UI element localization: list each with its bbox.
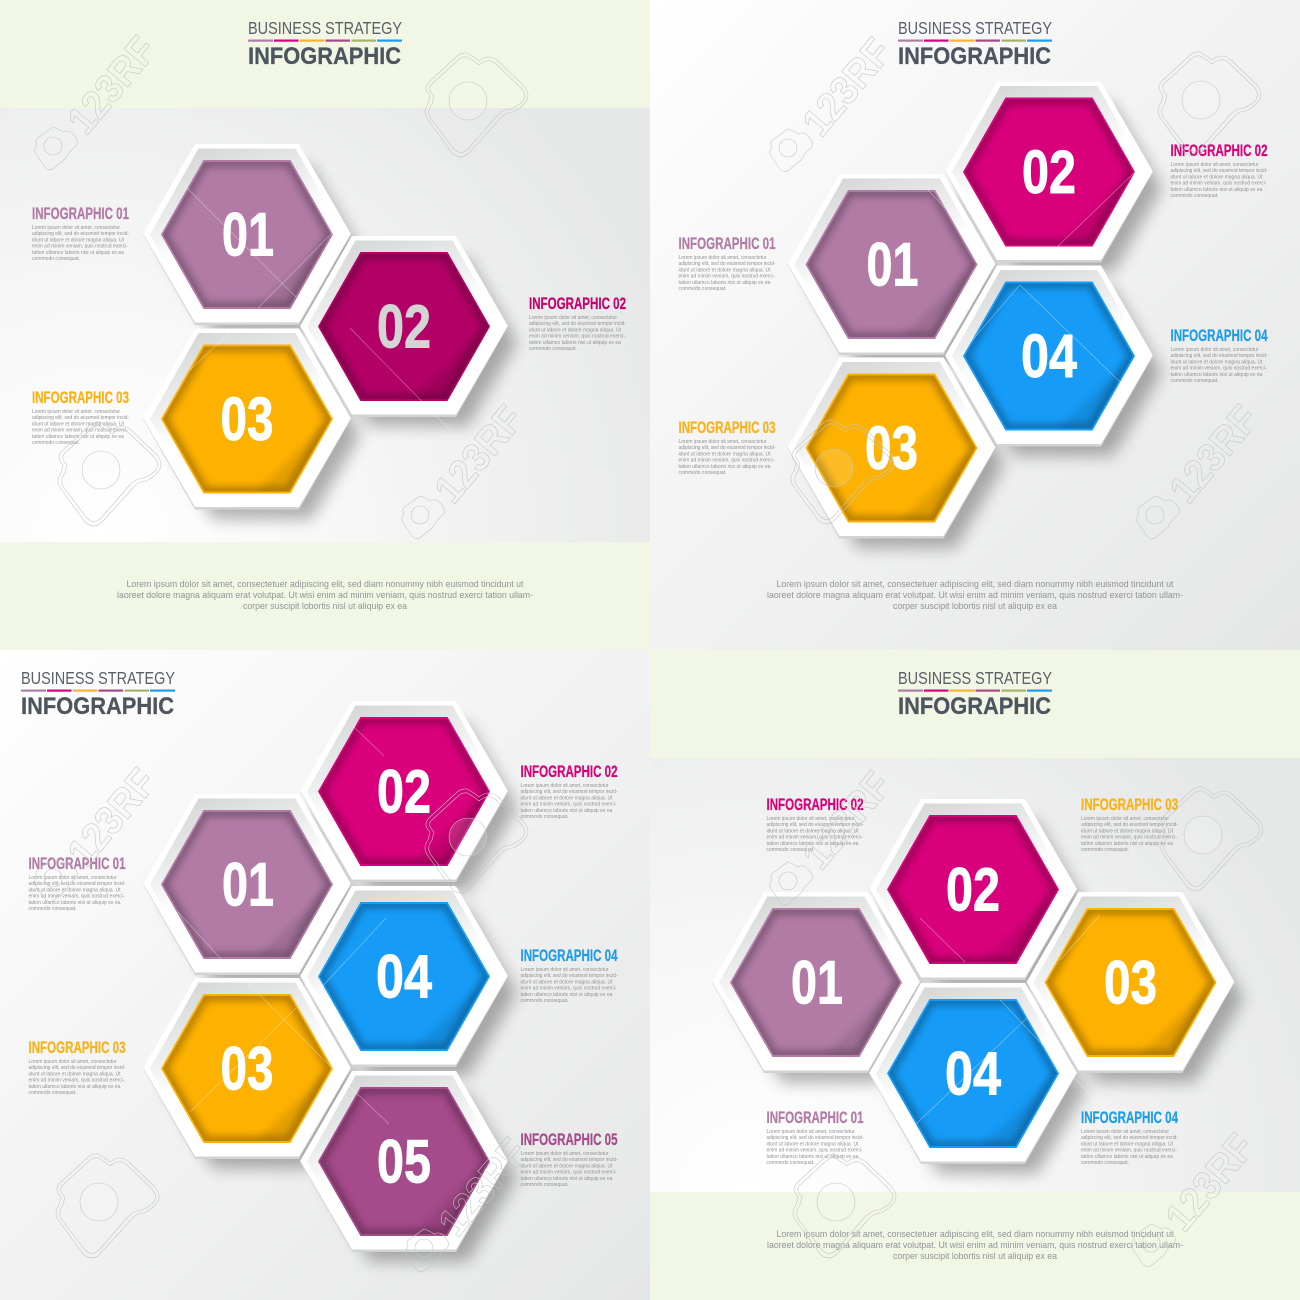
label 02: Lorem ipsum dolor sit amet, consectetur: [1170, 162, 1259, 168]
label 04: commodo consequat.: [1081, 1160, 1129, 1166]
label 02: tation ullamco laboris nisi ut aliquip ex ea: [529, 340, 622, 346]
hexagon 01: [143, 144, 351, 325]
label 01: INFOGRAPHIC 01: [766, 1108, 863, 1127]
label 01: commodo consequat.: [678, 286, 727, 292]
hexagon 04: [869, 983, 1077, 1164]
label 02: idunt ut labore et dolore magna aliqua. Ut: [766, 828, 859, 834]
label 01: idunt ut labore et dolore magna aliqua. Ut: [766, 1141, 859, 1147]
label 02: commodo consequat.: [520, 814, 569, 820]
label 04: Lorem ipsum dolor sit amet, consectetur: [1081, 1129, 1169, 1135]
hexagon 01: [143, 794, 351, 975]
label 04: tation ullamco laboris nisi ut aliquip ex ea: [1081, 1154, 1174, 1160]
label 03: [32, 388, 129, 446]
label 01: tation ullamco laboris nisi ut aliquip ex ea: [766, 1154, 859, 1160]
label 03: tation ullamco laboris nisi ut aliquip ex ea: [678, 464, 771, 470]
label 04: idunt ut labore et dolore magna aliqua. Ut: [1170, 359, 1263, 365]
label 03: INFOGRAPHIC 03: [32, 388, 129, 407]
hexagon 04: [300, 886, 508, 1067]
label 02: Lorem ipsum dolor sit amet, consectetur: [520, 783, 609, 789]
footer text: Lorem ipsum dolor sit amet, consectetuer adipiscing elit, sed diam nonummy nibh euismod tincidunt ut: [126, 579, 524, 589]
label 03: adipiscing elit, sed do eiusmod tempor incid-: [28, 1065, 126, 1071]
hexagon 04: 04: [945, 1039, 1001, 1107]
header: BUSINESS STRATEGY: [898, 18, 1052, 38]
panel: four hexagons, cluster: [650, 650, 1300, 1300]
label 02: enim ad minim veniam, quis nostrud exerci-: [1170, 181, 1267, 187]
label 02: [520, 762, 618, 820]
label 03: idunt ut labore et dolore magna aliqua. Ut: [1081, 828, 1173, 834]
label 03: adipiscing elit, sed do eiusmod tempor incid-: [32, 415, 129, 421]
label 04: adipiscing elit, sed do eiusmod tempor incid-: [520, 973, 618, 979]
label 02: idunt ut labore et dolore magna aliqua. Ut: [520, 795, 613, 801]
label 05: Lorem ipsum dolor sit amet, consectetur: [520, 1151, 609, 1157]
label 03: adipiscing elit, sed do eiusmod tempor incid-: [678, 445, 776, 451]
watermarks: 123RF: [1157, 1126, 1263, 1240]
footer text: laoreet dolore magna aliquam erat volutpat. Ut wisi enim ad minim veniam, quis nostrud exerci tation ullam-: [117, 590, 533, 600]
header: [21, 668, 175, 720]
label 03: commodo consequat.: [28, 1090, 77, 1096]
hexagon 01: 01: [222, 200, 274, 268]
label 02: [529, 294, 626, 352]
label 02: commodo consequat.: [1170, 193, 1219, 199]
hexagon 04: 04: [1021, 322, 1077, 390]
hexagon 04: [945, 266, 1153, 446]
label 02: adipiscing elit, sed do eiusmod tempor incid-: [520, 789, 618, 795]
label 03: adipiscing elit, sed do eiusmod tempor incid-: [1081, 822, 1178, 828]
hexagon 02: 02: [377, 292, 431, 360]
label 03: enim ad minim veniam, quis nostrud exerci-: [1081, 835, 1177, 841]
label 04: tation ullamco laboris nisi ut aliquip ex ea: [520, 992, 613, 998]
watermarks: 123RF: [430, 1131, 536, 1245]
label 02: adipiscing elit, sed do eiusmod tempor incid-: [529, 321, 626, 327]
label 02: idunt ut labore et dolore magna aliqua. Ut: [529, 327, 621, 333]
label 01: [32, 204, 129, 262]
label 02: tation ullamco laboris nisi ut aliquip ex ea: [520, 808, 613, 814]
label 01: commodo consequat.: [766, 1160, 815, 1166]
header: INFOGRAPHIC: [898, 43, 1051, 70]
watermarks: 123RF: [794, 31, 900, 145]
label 03: INFOGRAPHIC 03: [28, 1038, 125, 1057]
header: [898, 668, 1052, 720]
label 02: idunt ut labore et dolore magna aliqua. Ut: [1170, 174, 1263, 180]
header: [248, 18, 402, 70]
hexagon 03: [143, 328, 351, 510]
panel: five hexagons: [0, 650, 650, 1300]
label 04: INFOGRAPHIC 04: [520, 946, 618, 965]
hexagon 04: 04: [376, 942, 432, 1010]
label 02: Lorem ipsum dolor sit amet, consectetur: [529, 315, 617, 321]
label 01: INFOGRAPHIC 01: [28, 854, 125, 873]
label 01: adipiscing elit, sed do eiusmod tempor incid-: [32, 231, 129, 237]
label 01: Lorem ipsum dolor sit amet, consectetur: [678, 255, 767, 261]
label 01: Lorem ipsum dolor sit amet, consectetur: [32, 225, 120, 231]
label 03: idunt ut labore et dolore magna aliqua. Ut: [32, 421, 124, 427]
label 03: enim ad minim veniam, quis nostrud exerci-: [28, 1078, 125, 1084]
label 02: [1170, 141, 1268, 199]
label 05: commodo consequat.: [520, 1182, 569, 1188]
hexagon 01: [788, 174, 996, 355]
label 03: [28, 1038, 126, 1096]
label 02: tation ullamco laboris nisi ut aliquip ex ea: [766, 841, 859, 847]
footer text: laoreet dolore magna aliquam erat volutpat. Ut wisi enim ad minim veniam, quis nostrud exerci tation ullam-: [767, 590, 1183, 600]
hexagon 03: 03: [865, 414, 918, 482]
label 02: INFOGRAPHIC 02: [529, 294, 626, 313]
hexagon 01: [712, 892, 920, 1073]
label 03: Lorem ipsum dolor sit amet, consectetur: [32, 409, 120, 415]
header: BUSINESS STRATEGY: [248, 18, 402, 38]
label 01: enim ad minim veniam, quis nostrud exerci-: [28, 894, 125, 900]
hexagon 05: [300, 1071, 508, 1252]
hexagon 03: 03: [220, 385, 274, 453]
label 04: [1081, 1108, 1178, 1166]
header: BUSINESS STRATEGY: [898, 668, 1052, 688]
label 05: idunt ut labore et dolore magna aliqua. Ut: [520, 1163, 613, 1169]
panel: three hexagons: [0, 0, 650, 650]
hexagon 02: [869, 799, 1077, 980]
label 03: enim ad minim veniam, quis nostrud exerci-: [32, 428, 128, 434]
footer text: [767, 1229, 1183, 1261]
footer text: corper suscipit lobortis nisl ut aliquip ex ea: [893, 1251, 1057, 1261]
hexagon 03: 03: [1104, 948, 1157, 1016]
label 04: idunt ut labore et dolore magna aliqua. Ut: [1081, 1141, 1173, 1147]
panel: four hexagons, right: [650, 0, 1300, 650]
label 05: enim ad minim veniam, quis nostrud exerci-: [520, 1170, 617, 1176]
watermarks: 123RF: [59, 29, 165, 143]
label 02: enim ad minim veniam, quis nostrud exerci-: [520, 802, 617, 808]
footer text: [117, 579, 533, 611]
header: [898, 18, 1052, 70]
hexagon 03: [788, 358, 996, 538]
label 03: [678, 418, 776, 476]
label 01: Lorem ipsum dolor sit amet, consectetur: [766, 1129, 855, 1135]
label 03: Lorem ipsum dolor sit amet, consectetur: [28, 1059, 117, 1065]
label 03: INFOGRAPHIC 03: [678, 418, 775, 437]
label 01: enim ad minim veniam, quis nostrud exerci-: [678, 274, 775, 280]
label 01: idunt ut labore et dolore magna aliqua. Ut: [32, 237, 124, 243]
label 05: INFOGRAPHIC 05: [520, 1130, 617, 1149]
hexagon 02: [945, 82, 1153, 262]
label 01: tation ullamco laboris nisi ut aliquip ex ea: [28, 900, 121, 906]
hexagon 03: [143, 978, 351, 1159]
hexagon 02: 02: [377, 757, 431, 825]
label 04: [1170, 326, 1268, 384]
label 03: tation ullamco laboris nisi ut aliquip ex ea: [28, 1084, 121, 1090]
label 04: adipiscing elit, sed do eiusmod tempor incid-: [1170, 353, 1268, 359]
label 01: [28, 854, 126, 912]
label 04: [520, 946, 618, 1004]
hexagon 02: 02: [946, 855, 1000, 923]
header: INFOGRAPHIC: [21, 693, 174, 720]
label 02: Lorem ipsum dolor sit amet, consectetur: [766, 816, 855, 822]
label 05: [520, 1130, 618, 1188]
watermarks: 123RF: [1161, 398, 1267, 512]
label 04: Lorem ipsum dolor sit amet, consectetur: [1170, 347, 1259, 353]
label 02: enim ad minim veniam, quis nostrud exerci-: [766, 835, 863, 841]
label 01: [766, 1108, 864, 1166]
label 01: commodo consequat.: [32, 256, 80, 262]
hexagon 01: 01: [222, 850, 274, 918]
label 01: enim ad minim veniam, quis nostrud exerci-: [766, 1148, 863, 1154]
label 04: enim ad minim veniam, quis nostrud exerci-: [1081, 1148, 1177, 1154]
label 01: tation ullamco laboris nisi ut aliquip ex ea: [678, 280, 771, 286]
label 02: [766, 795, 864, 853]
label 04: commodo consequat.: [520, 998, 569, 1004]
label 01: tation ullamco laboris nisi ut aliquip ex ea: [32, 250, 125, 256]
label 03: commodo consequat.: [1081, 847, 1129, 853]
label 03: idunt ut labore et dolore magna aliqua. Ut: [28, 1071, 121, 1077]
label 02: commodo consequat.: [529, 346, 577, 352]
label 02: enim ad minim veniam, quis nostrud exerci-: [529, 334, 625, 340]
hexagon 05: 05: [377, 1127, 431, 1195]
label 03: idunt ut labore et dolore magna aliqua. Ut: [678, 451, 771, 457]
label 03: Lorem ipsum dolor sit amet, consectetur: [1081, 816, 1169, 822]
label 01: Lorem ipsum dolor sit amet, consectetur: [28, 875, 117, 881]
footer text: Lorem ipsum dolor sit amet, consectetuer adipiscing elit, sed diam nonummy nibh euismod tincidunt ut: [776, 579, 1174, 589]
label 01: adipiscing elit, sed do eiusmod tempor incid-: [28, 881, 126, 887]
label 03: tation ullamco laboris nisi ut aliquip ex ea: [32, 434, 125, 440]
label 01: [678, 234, 776, 292]
watermarks: 123RF: [59, 761, 165, 875]
header: INFOGRAPHIC: [248, 43, 401, 70]
label 01: idunt ut labore et dolore magna aliqua. Ut: [28, 887, 121, 893]
label 04: Lorem ipsum dolor sit amet, consectetur: [520, 967, 609, 973]
label 03: tation ullamco laboris nisi ut aliquip ex ea: [1081, 841, 1174, 847]
header: INFOGRAPHIC: [898, 693, 1051, 720]
label 02: commodo consequat.: [766, 847, 815, 853]
label 01: enim ad minim veniam, quis nostrud exerci-: [32, 244, 128, 250]
label 03: INFOGRAPHIC 03: [1081, 795, 1178, 814]
hexagon 02: [300, 236, 508, 417]
hexagon 02: 02: [1022, 138, 1076, 206]
label 04: tation ullamco laboris nisi ut aliquip ex ea: [1170, 372, 1263, 378]
label 03: commodo consequat.: [678, 470, 727, 476]
label 03: commodo consequat.: [32, 440, 80, 446]
label 05: adipiscing elit, sed do eiusmod tempor incid-: [520, 1157, 618, 1163]
footer text: Lorem ipsum dolor sit amet, consectetuer adipiscing elit, sed diam nonummy nibh euismod tincidunt ut: [776, 1229, 1174, 1239]
label 02: INFOGRAPHIC 02: [766, 795, 863, 814]
label 03: [1081, 795, 1178, 853]
label 04: adipiscing elit, sed do eiusmod tempor incid-: [1081, 1135, 1178, 1141]
header: BUSINESS STRATEGY: [21, 668, 175, 688]
watermarks: 123RF: [794, 764, 900, 878]
label 02: adipiscing elit, sed do eiusmod tempor incid-: [766, 822, 864, 828]
label 01: INFOGRAPHIC 01: [678, 234, 775, 253]
footer text: [767, 579, 1183, 611]
footer text: corper suscipit lobortis nisl ut aliquip ex ea: [893, 601, 1057, 611]
hexagon 01: 01: [866, 230, 918, 298]
label 04: enim ad minim veniam, quis nostrud exerci-: [520, 986, 617, 992]
label 03: enim ad minim veniam, quis nostrud exerci-: [678, 458, 775, 464]
label 04: enim ad minim veniam, quis nostrud exerci-: [1170, 366, 1267, 372]
hexagon 03: [1026, 892, 1234, 1073]
watermarks: 123RF: [426, 398, 532, 512]
footer text: laoreet dolore magna aliquam erat volutpat. Ut wisi enim ad minim veniam, quis nostrud exerci tation ullam-: [767, 1240, 1183, 1250]
label 01: idunt ut labore et dolore magna aliqua. Ut: [678, 267, 771, 273]
label 01: INFOGRAPHIC 01: [32, 204, 129, 223]
hexagon 02: [300, 701, 508, 882]
label 03: Lorem ipsum dolor sit amet, consectetur: [678, 439, 767, 445]
label 02: adipiscing elit, sed do eiusmod tempor incid-: [1170, 168, 1268, 174]
label 04: INFOGRAPHIC 04: [1081, 1108, 1178, 1127]
hexagon 01: 01: [791, 948, 843, 1016]
label 01: commodo consequat.: [28, 906, 77, 912]
label 02: INFOGRAPHIC 02: [520, 762, 617, 781]
label 01: adipiscing elit, sed do eiusmod tempor incid-: [766, 1135, 864, 1141]
footer text: corper suscipit lobortis nisl ut aliquip ex ea: [243, 601, 407, 611]
label 04: commodo consequat.: [1170, 378, 1219, 384]
label 05: tation ullamco laboris nisi ut aliquip ex ea: [520, 1176, 613, 1182]
hexagon 03: 03: [220, 1034, 274, 1102]
label 01: adipiscing elit, sed do eiusmod tempor incid-: [678, 261, 776, 267]
label 02: tation ullamco laboris nisi ut aliquip ex ea: [1170, 187, 1263, 193]
label 04: idunt ut labore et dolore magna aliqua. Ut: [520, 979, 613, 985]
